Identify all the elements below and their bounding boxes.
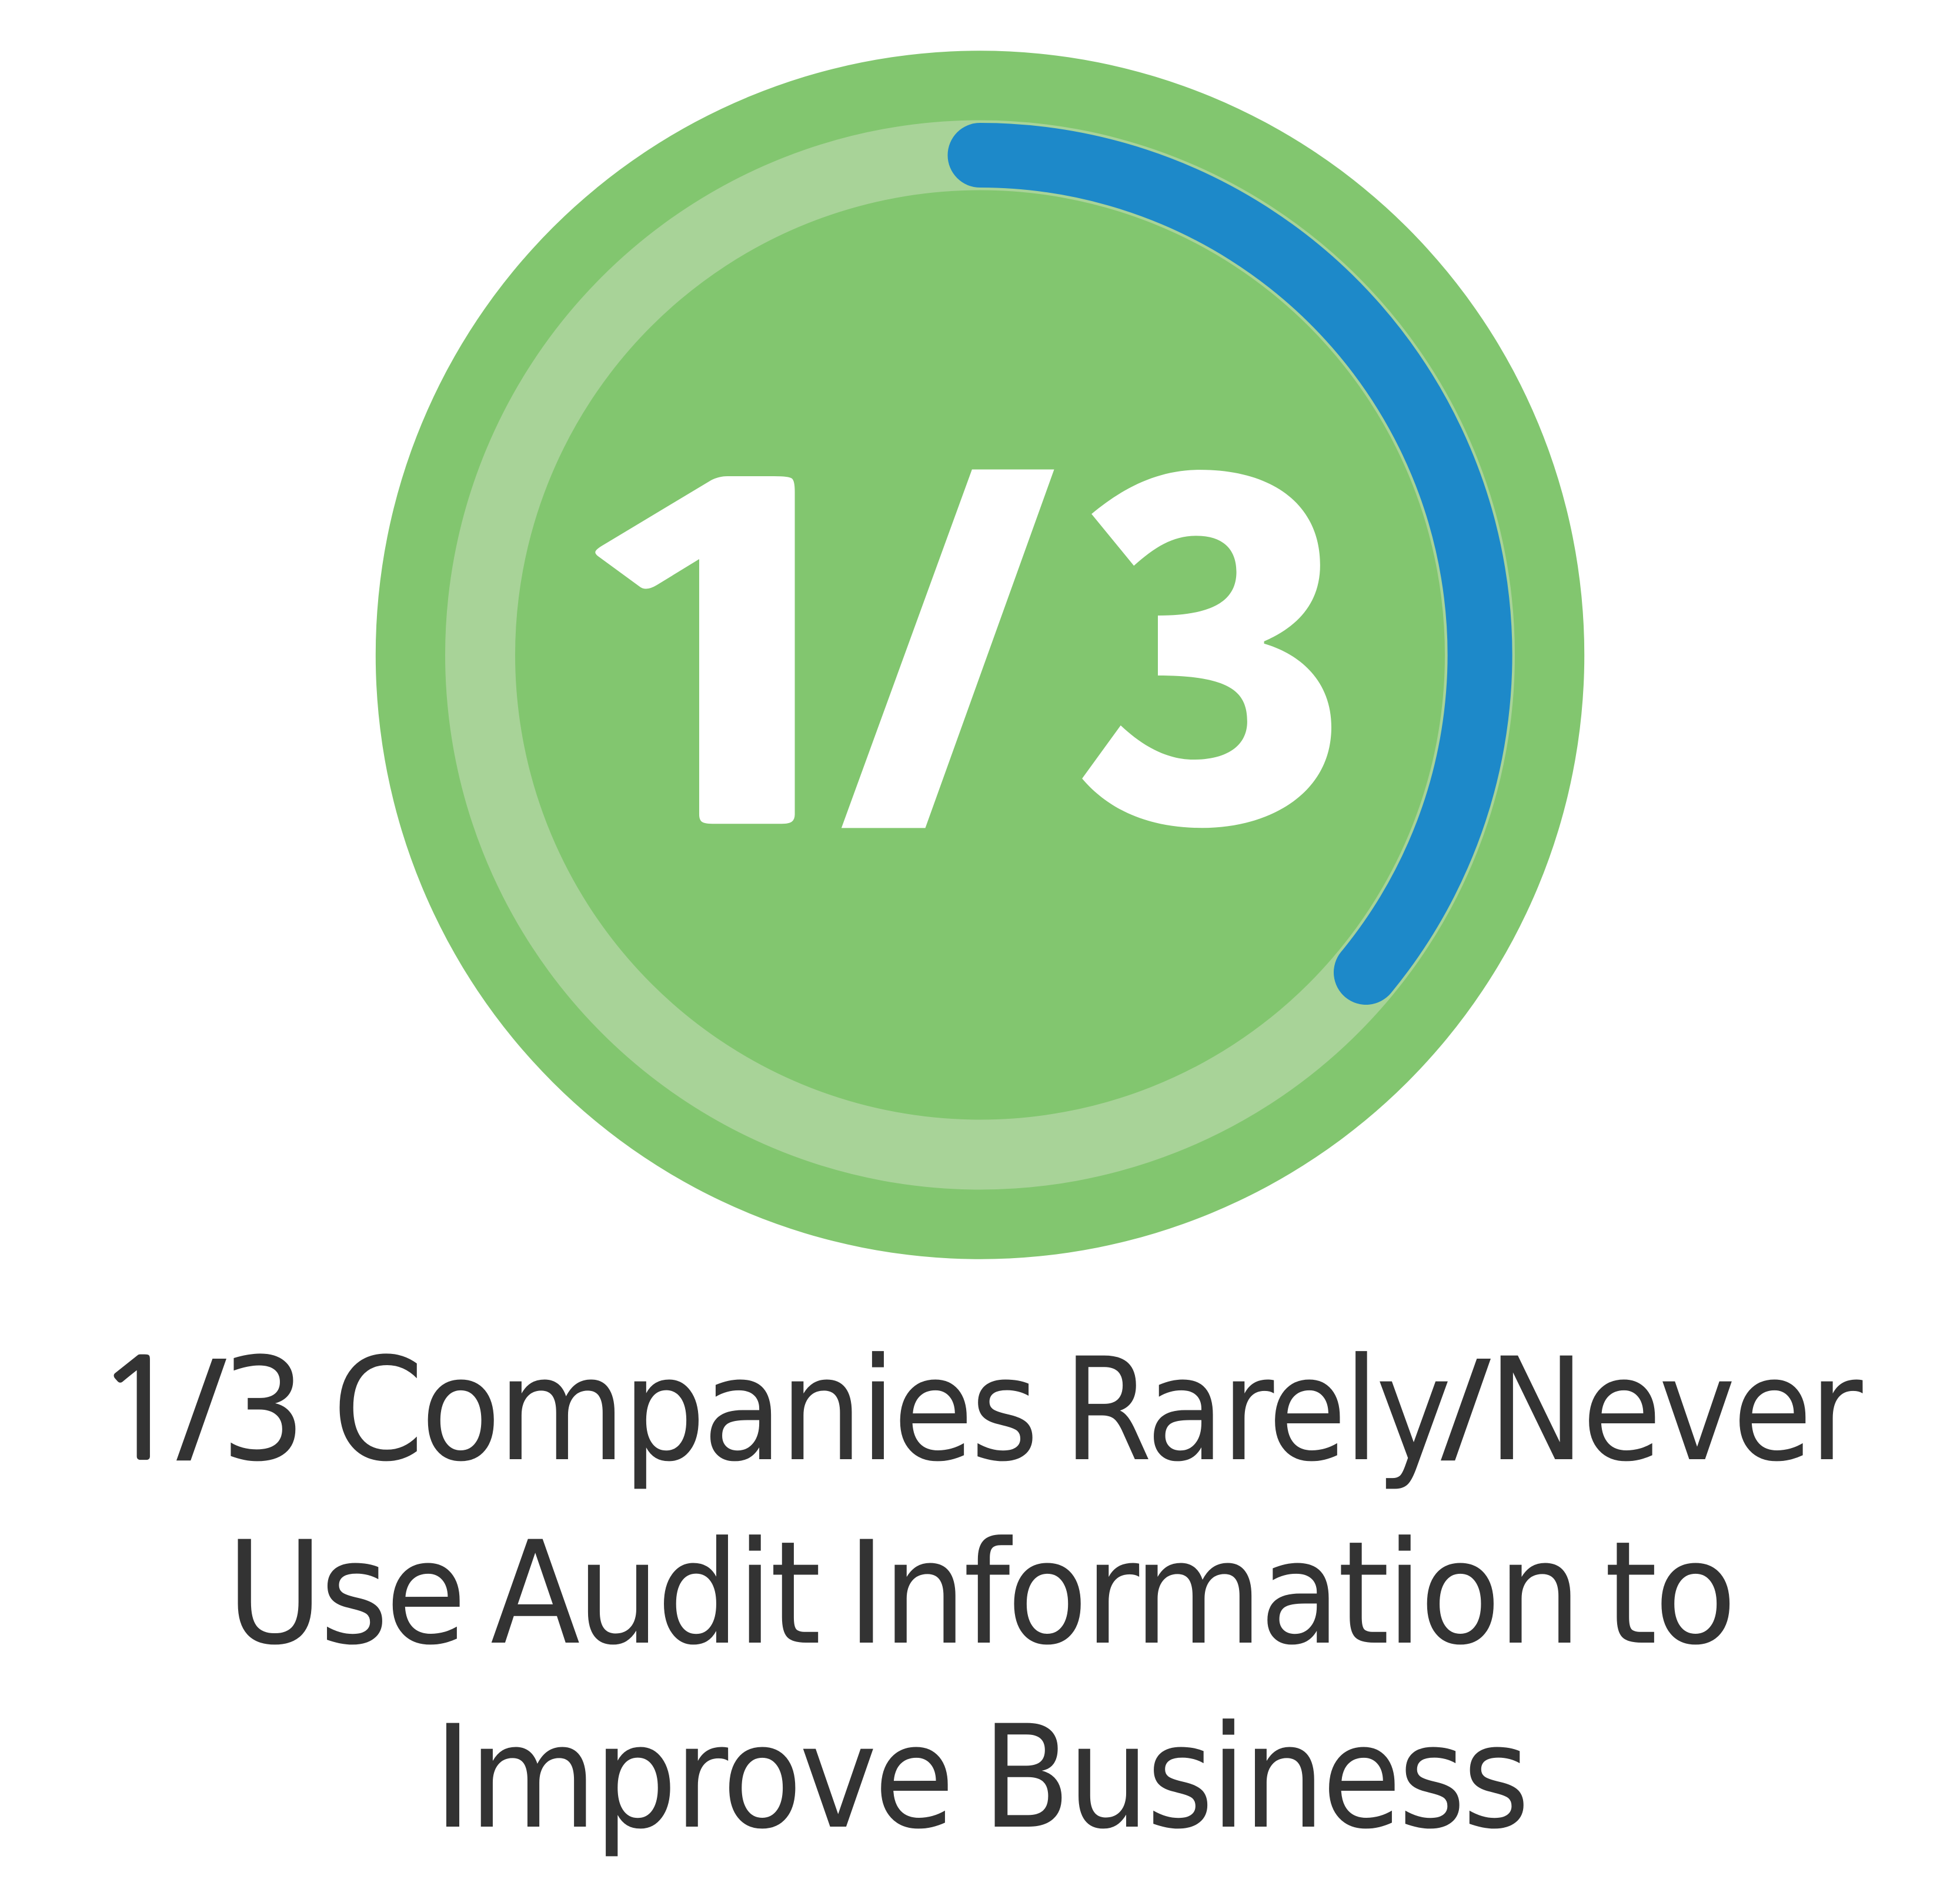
caption line 1: 3 — [221, 1327, 303, 1493]
caption line 2: Use — [226, 1511, 463, 1677]
caption line 2: to — [1604, 1511, 1734, 1677]
caption line 3: Improve — [433, 1695, 951, 1861]
big figure: 1/3 — [522, 270, 1357, 958]
caption line 1: / — [176, 1334, 227, 1489]
caption line 1: 1 — [95, 1340, 183, 1478]
caption line 1: Rarely — [1063, 1327, 1448, 1493]
light track ring — [480, 155, 1480, 1155]
digit 3: 3 — [1071, 270, 1357, 958]
caption line 3: Business — [982, 1695, 1527, 1861]
caption line 1: Companies — [332, 1327, 1036, 1493]
caption — [95, 1327, 1863, 1861]
caption line 2: Audit — [490, 1511, 819, 1677]
caption line 1: / — [1441, 1334, 1491, 1489]
digit 1: 1 — [522, 439, 944, 887]
donut gauge — [376, 51, 1584, 1259]
caption line 2: Information — [847, 1511, 1578, 1677]
caption line 3 — [433, 1695, 1527, 1861]
caption line 1 — [95, 1327, 1863, 1493]
slash: / — [827, 382, 1071, 921]
caption line 2 — [226, 1511, 1734, 1677]
blue progress arc — [980, 155, 1480, 972]
caption line 1: Never — [1488, 1327, 1863, 1493]
green disc — [376, 51, 1584, 1259]
